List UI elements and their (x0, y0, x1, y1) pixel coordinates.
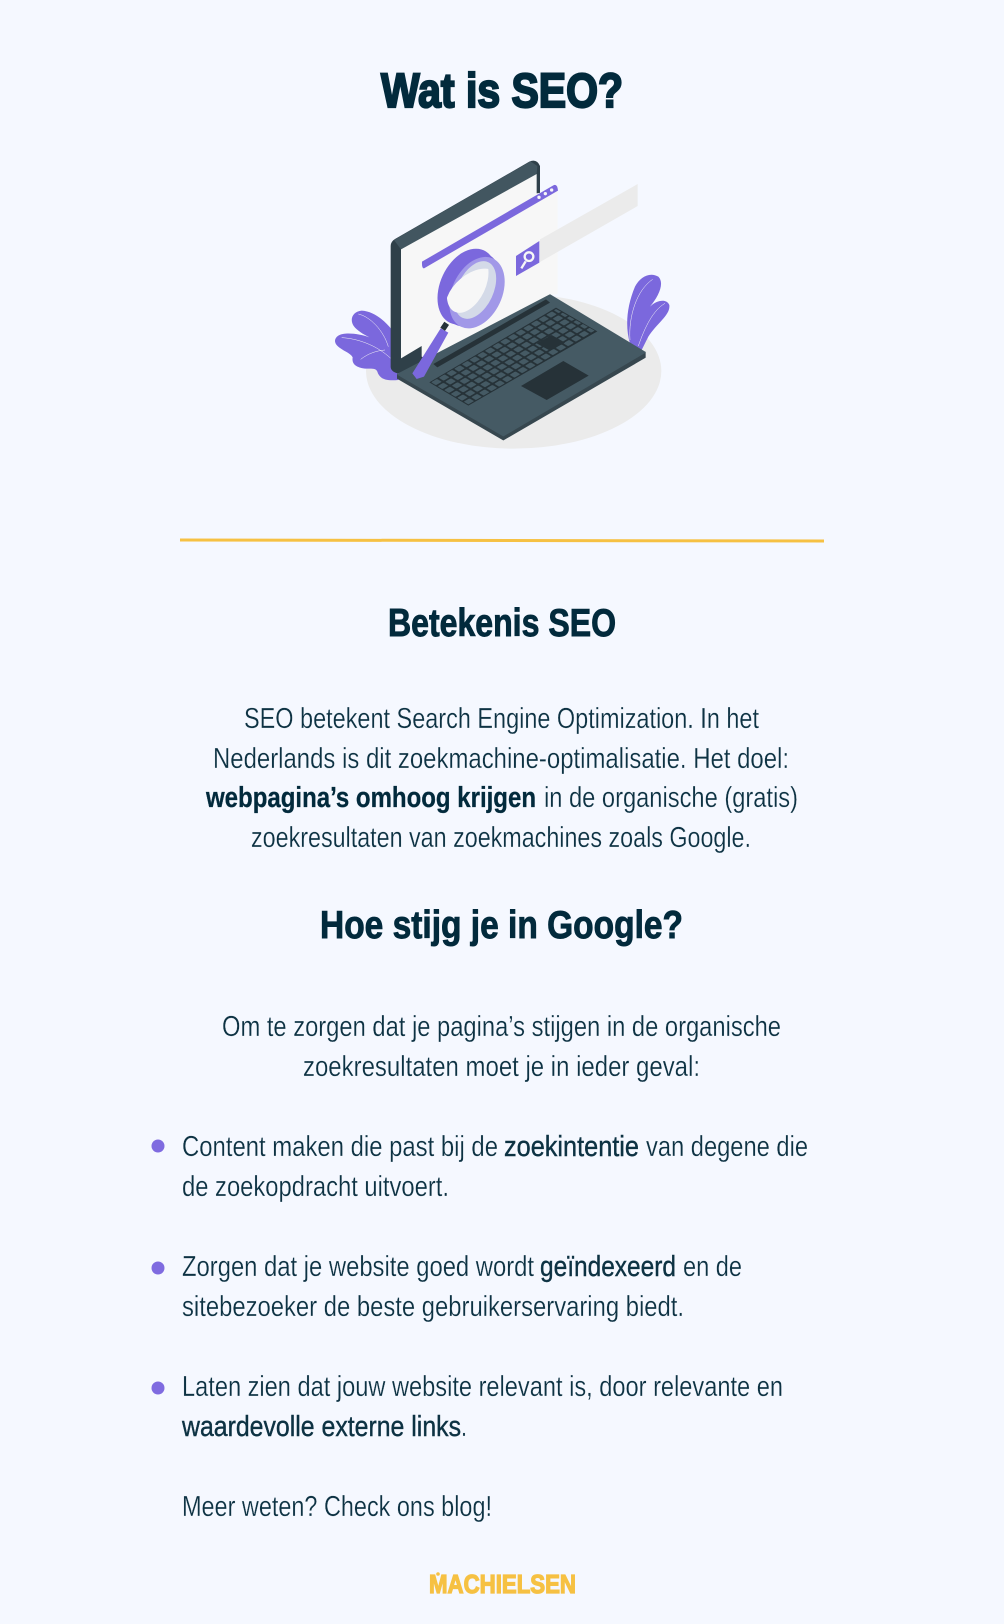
paragraph: meaning of SEO: SEO betekent Search Engine Optimization. In het (244, 703, 759, 735)
right plant (627, 275, 669, 350)
heading: Betekenis SEO: Betekenis SEO (388, 602, 616, 645)
handle (412, 328, 448, 379)
intro paragraph: Om te zorgen dat je pagina’s stijgen in de organische (222, 1011, 781, 1043)
bullet item 1 (152, 1131, 808, 1203)
paragraph: meaning of SEO: in de organische (gratis) (544, 782, 798, 814)
bullet item 1: de zoekopdracht uitvoert. (182, 1171, 449, 1203)
magnifying glass (412, 248, 505, 379)
bullet item 1: Content maken die past bij de (182, 1131, 498, 1163)
keyboard (429, 308, 597, 406)
logo: Machielsen: MACHIELSEN (429, 1569, 576, 1599)
bullet item 2: en de (683, 1251, 742, 1283)
laptop base edge (398, 352, 645, 440)
handle connector (443, 323, 447, 329)
bullet item 2: Zorgen dat je website goed wordt (182, 1251, 534, 1283)
intro paragraph (222, 1011, 781, 1083)
bullet dot (152, 1140, 164, 1152)
bullet item 1: zoekintentie (504, 1131, 639, 1163)
logo crown dot (436, 1572, 440, 1576)
yellow divider (180, 538, 824, 542)
hinge (433, 299, 550, 367)
bullet item 3: . (461, 1411, 467, 1443)
bullet item 2 (152, 1251, 742, 1323)
bullet item 2: geïndexeerd (540, 1251, 676, 1283)
address bar (422, 185, 558, 268)
paragraph: meaning of SEO (205, 703, 798, 854)
laptop lid (391, 161, 540, 373)
intro paragraph: zoekresultaten moet je in ieder geval: (303, 1051, 700, 1083)
screen pane (401, 174, 558, 363)
bullet item 3: waardevolle externe links (181, 1411, 461, 1443)
lens rim (426, 239, 516, 337)
touchpad (521, 361, 589, 400)
bullet dot (152, 1382, 164, 1394)
title: Wat is SEO? (381, 65, 623, 118)
lens glass (447, 261, 496, 319)
paragraph: meaning of SEO: webpagina’s omhoog krijgen (205, 782, 536, 814)
call to action: Meer weten? Check ons blog! (182, 1491, 492, 1523)
illustration: laptop with magnifying glass (335, 161, 669, 449)
lid top bezel (394, 161, 537, 249)
heading: Hoe stijg je in Google?: Hoe stijg je in Google? (320, 904, 683, 947)
search icon box (516, 241, 539, 276)
bullet item 3 (152, 1371, 783, 1443)
paragraph: meaning of SEO: zoekresultaten van zoekmachines zoals Google. (251, 822, 751, 854)
floating grey band (540, 184, 638, 262)
bullet dot (152, 1262, 164, 1274)
left plant (335, 311, 398, 380)
bullet item 1: van degene die (646, 1131, 808, 1163)
laptop base top (398, 295, 645, 436)
ground shadow (366, 293, 661, 449)
bullet item 2: sitebezoeker de beste gebruikerservaring biedt. (182, 1291, 684, 1323)
paragraph: meaning of SEO: Nederlands is dit zoekmachine-optimalisatie. Het doel: (213, 743, 789, 775)
bullet item 3: Laten zien dat jouw website relevant is, door relevante en (182, 1371, 783, 1403)
